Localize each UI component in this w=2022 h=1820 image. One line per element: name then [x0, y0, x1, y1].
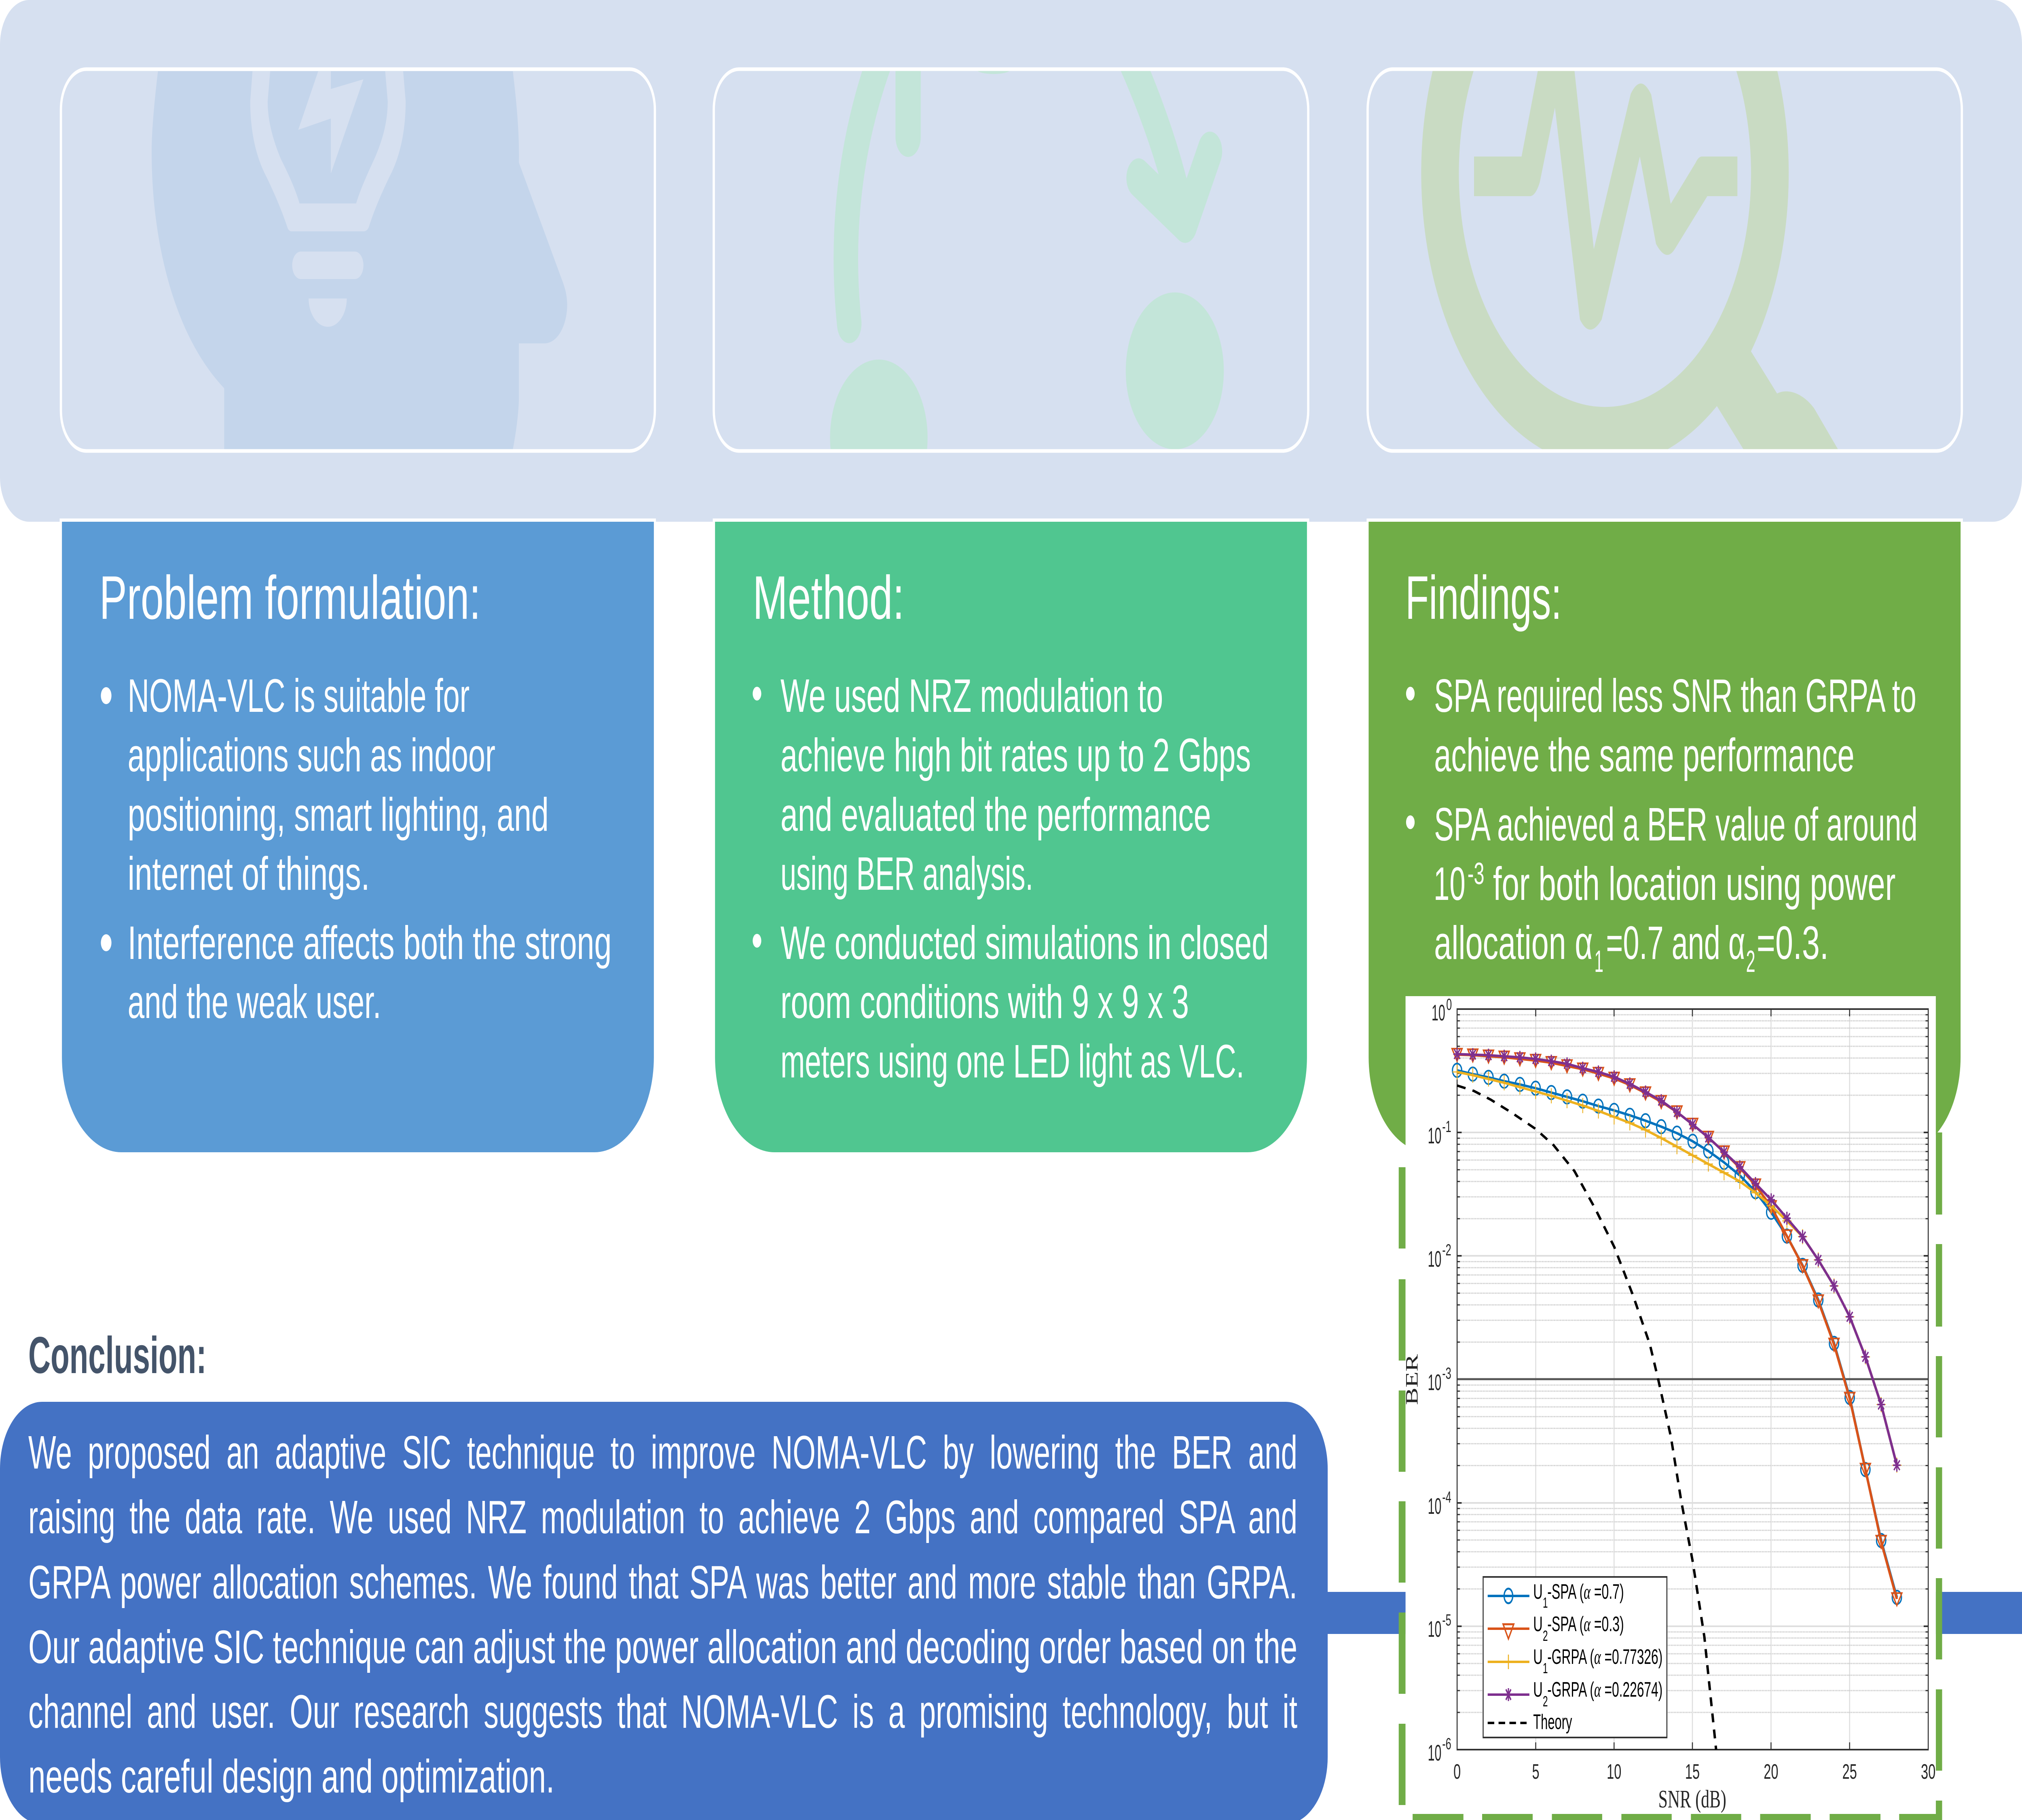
panel: method: room conditions with 9 x 9 x 3 [780, 976, 1189, 1028]
y axis tick labels: 0 [1446, 996, 1452, 1014]
panel: conclusion: raising the data rate. We used NRZ modulation to achieve 2 Gbps and compared SPA and [28, 1491, 1297, 1543]
panel: findings: 10 [1434, 858, 1466, 910]
panel: method: Method: [753, 563, 904, 632]
y axis tick labels: -2 [1442, 1241, 1451, 1259]
chart legend: -GRPA (α =0.22674) [1547, 1678, 1662, 1701]
x axis tick labels: 30 [1921, 1760, 1935, 1784]
panel: problem formulation: and the weak user. [128, 976, 381, 1028]
y axis tick labels: 10 [1428, 1617, 1441, 1642]
icon: head with light bulb [152, 71, 567, 449]
panel: conclusion: needs careful design and optimization. [28, 1750, 554, 1803]
y axis tick labels [1428, 996, 1452, 1765]
panel: conclusion: Our adaptive SIC technique can adjust the power allocation and decoding order based on the [28, 1621, 1297, 1673]
panel: findings: =0.3. [1757, 917, 1829, 969]
panel: findings: 2 [1746, 945, 1756, 979]
x axis tick labels: 25 [1842, 1760, 1857, 1784]
panel: findings: allocation α [1434, 917, 1593, 969]
y axis tick labels: -1 [1442, 1118, 1451, 1136]
dashed chart border [1399, 1132, 1942, 1820]
panel: problem formulation: applications such as indoor [128, 729, 495, 781]
panel: conclusion: We proposed an adaptive SIC technique to improve NOMA-VLC by lowering the BER and [28, 1426, 1297, 1479]
y axis tick labels: 10 [1428, 1123, 1441, 1148]
y axis tick labels: -6 [1442, 1735, 1451, 1753]
heading: conclusion: Conclusion: [28, 1326, 207, 1384]
panel: method: meters using one LED light as VLC. [780, 1035, 1244, 1088]
chart legend: U [1533, 1678, 1543, 1701]
y axis tick labels: -3 [1442, 1365, 1451, 1383]
y axis tick labels: 10 [1428, 1246, 1441, 1272]
panel: findings: Findings: [1405, 563, 1562, 632]
y axis tick labels: 10 [1428, 1740, 1441, 1765]
panel: findings: SPA achieved a BER value of around [1434, 798, 1918, 851]
chart legend: U [1533, 1580, 1543, 1604]
panel: conclusion [0, 1402, 1328, 1820]
chart legend: U [1533, 1613, 1543, 1636]
top band [0, 0, 2022, 522]
panel: problem formulation: Interference affects both the strong [128, 917, 611, 969]
panel: problem formulation: Problem formulation: [99, 563, 481, 632]
chart legend [1483, 1577, 1667, 1737]
chart grid [1457, 1009, 1928, 1750]
y axis title: BER [1402, 1354, 1421, 1405]
icon frames [61, 69, 1962, 451]
panel: method: We conducted simulations in closed [780, 917, 1269, 969]
x axis tick labels: 15 [1685, 1760, 1700, 1784]
chart legend: 2 [1543, 1628, 1548, 1644]
chart legend: -SPA (α =0.7) [1547, 1580, 1624, 1604]
panel: findings: achieve the same performance [1434, 729, 1855, 781]
panel: findings: 1 [1594, 945, 1603, 979]
x axis tick labels: 5 [1532, 1760, 1540, 1784]
panel: method: using BER analysis. [780, 848, 1033, 900]
chart legend: U [1533, 1645, 1543, 1669]
panel: findings: for both location using power [1493, 858, 1896, 910]
panel: method [713, 518, 1309, 1152]
x axis tick labels: 20 [1764, 1760, 1778, 1784]
y axis tick labels: 10 [1428, 1370, 1441, 1395]
panel: problem formulation: NOMA-VLC is suitable for [128, 670, 470, 722]
icon: magnifier with pulse [1421, 71, 1838, 449]
chart legend: 1 [1543, 1595, 1548, 1611]
chart legend: -GRPA (α =0.77326) [1547, 1645, 1662, 1669]
panel: method: We used NRZ modulation to [780, 670, 1163, 722]
panel: findings [1366, 518, 1963, 1152]
panel: conclusion: GRPA power allocation schemes. We found that SPA was better and more stable than GRPA. [28, 1556, 1297, 1608]
x axis tick labels: 10 [1607, 1760, 1621, 1784]
panel: method: achieve high bit rates up to 2 Gbps [780, 729, 1251, 781]
x axis tick labels: 0 [1453, 1760, 1461, 1784]
chart: BER versus SNR [1402, 996, 1936, 1814]
chart legend: Theory [1533, 1710, 1572, 1734]
y axis tick labels: 10 [1428, 1494, 1441, 1519]
panel: findings: =0.7 and α [1606, 917, 1745, 969]
y axis tick labels: -4 [1442, 1488, 1451, 1507]
panel: problem formulation: internet of things. [128, 848, 370, 900]
chart legend: -SPA (α =0.3) [1547, 1613, 1624, 1636]
panel: problem formulation [60, 518, 656, 1152]
icon: circular method arrows [830, 71, 1224, 449]
panel: findings: -3 [1468, 857, 1485, 891]
panel: method: and evaluated the performance [780, 789, 1211, 841]
panel: conclusion: channel and user. Our research suggests that NOMA-VLC is a promising technology, but it [28, 1686, 1297, 1738]
panel: findings: SPA required less SNR than GRPA to [1434, 670, 1916, 722]
chart curves [1457, 1054, 1897, 1750]
x axis tick labels [1453, 1760, 1935, 1784]
chart legend: 1 [1543, 1661, 1548, 1676]
x axis title: SNR (dB) [1658, 1786, 1726, 1813]
connector bar [1314, 1592, 2022, 1634]
panel: problem formulation: positioning, smart lighting, and [128, 789, 549, 841]
y axis tick labels: 10 [1432, 1000, 1445, 1025]
chart legend: 2 [1543, 1694, 1548, 1710]
y axis tick labels: -5 [1442, 1611, 1451, 1630]
